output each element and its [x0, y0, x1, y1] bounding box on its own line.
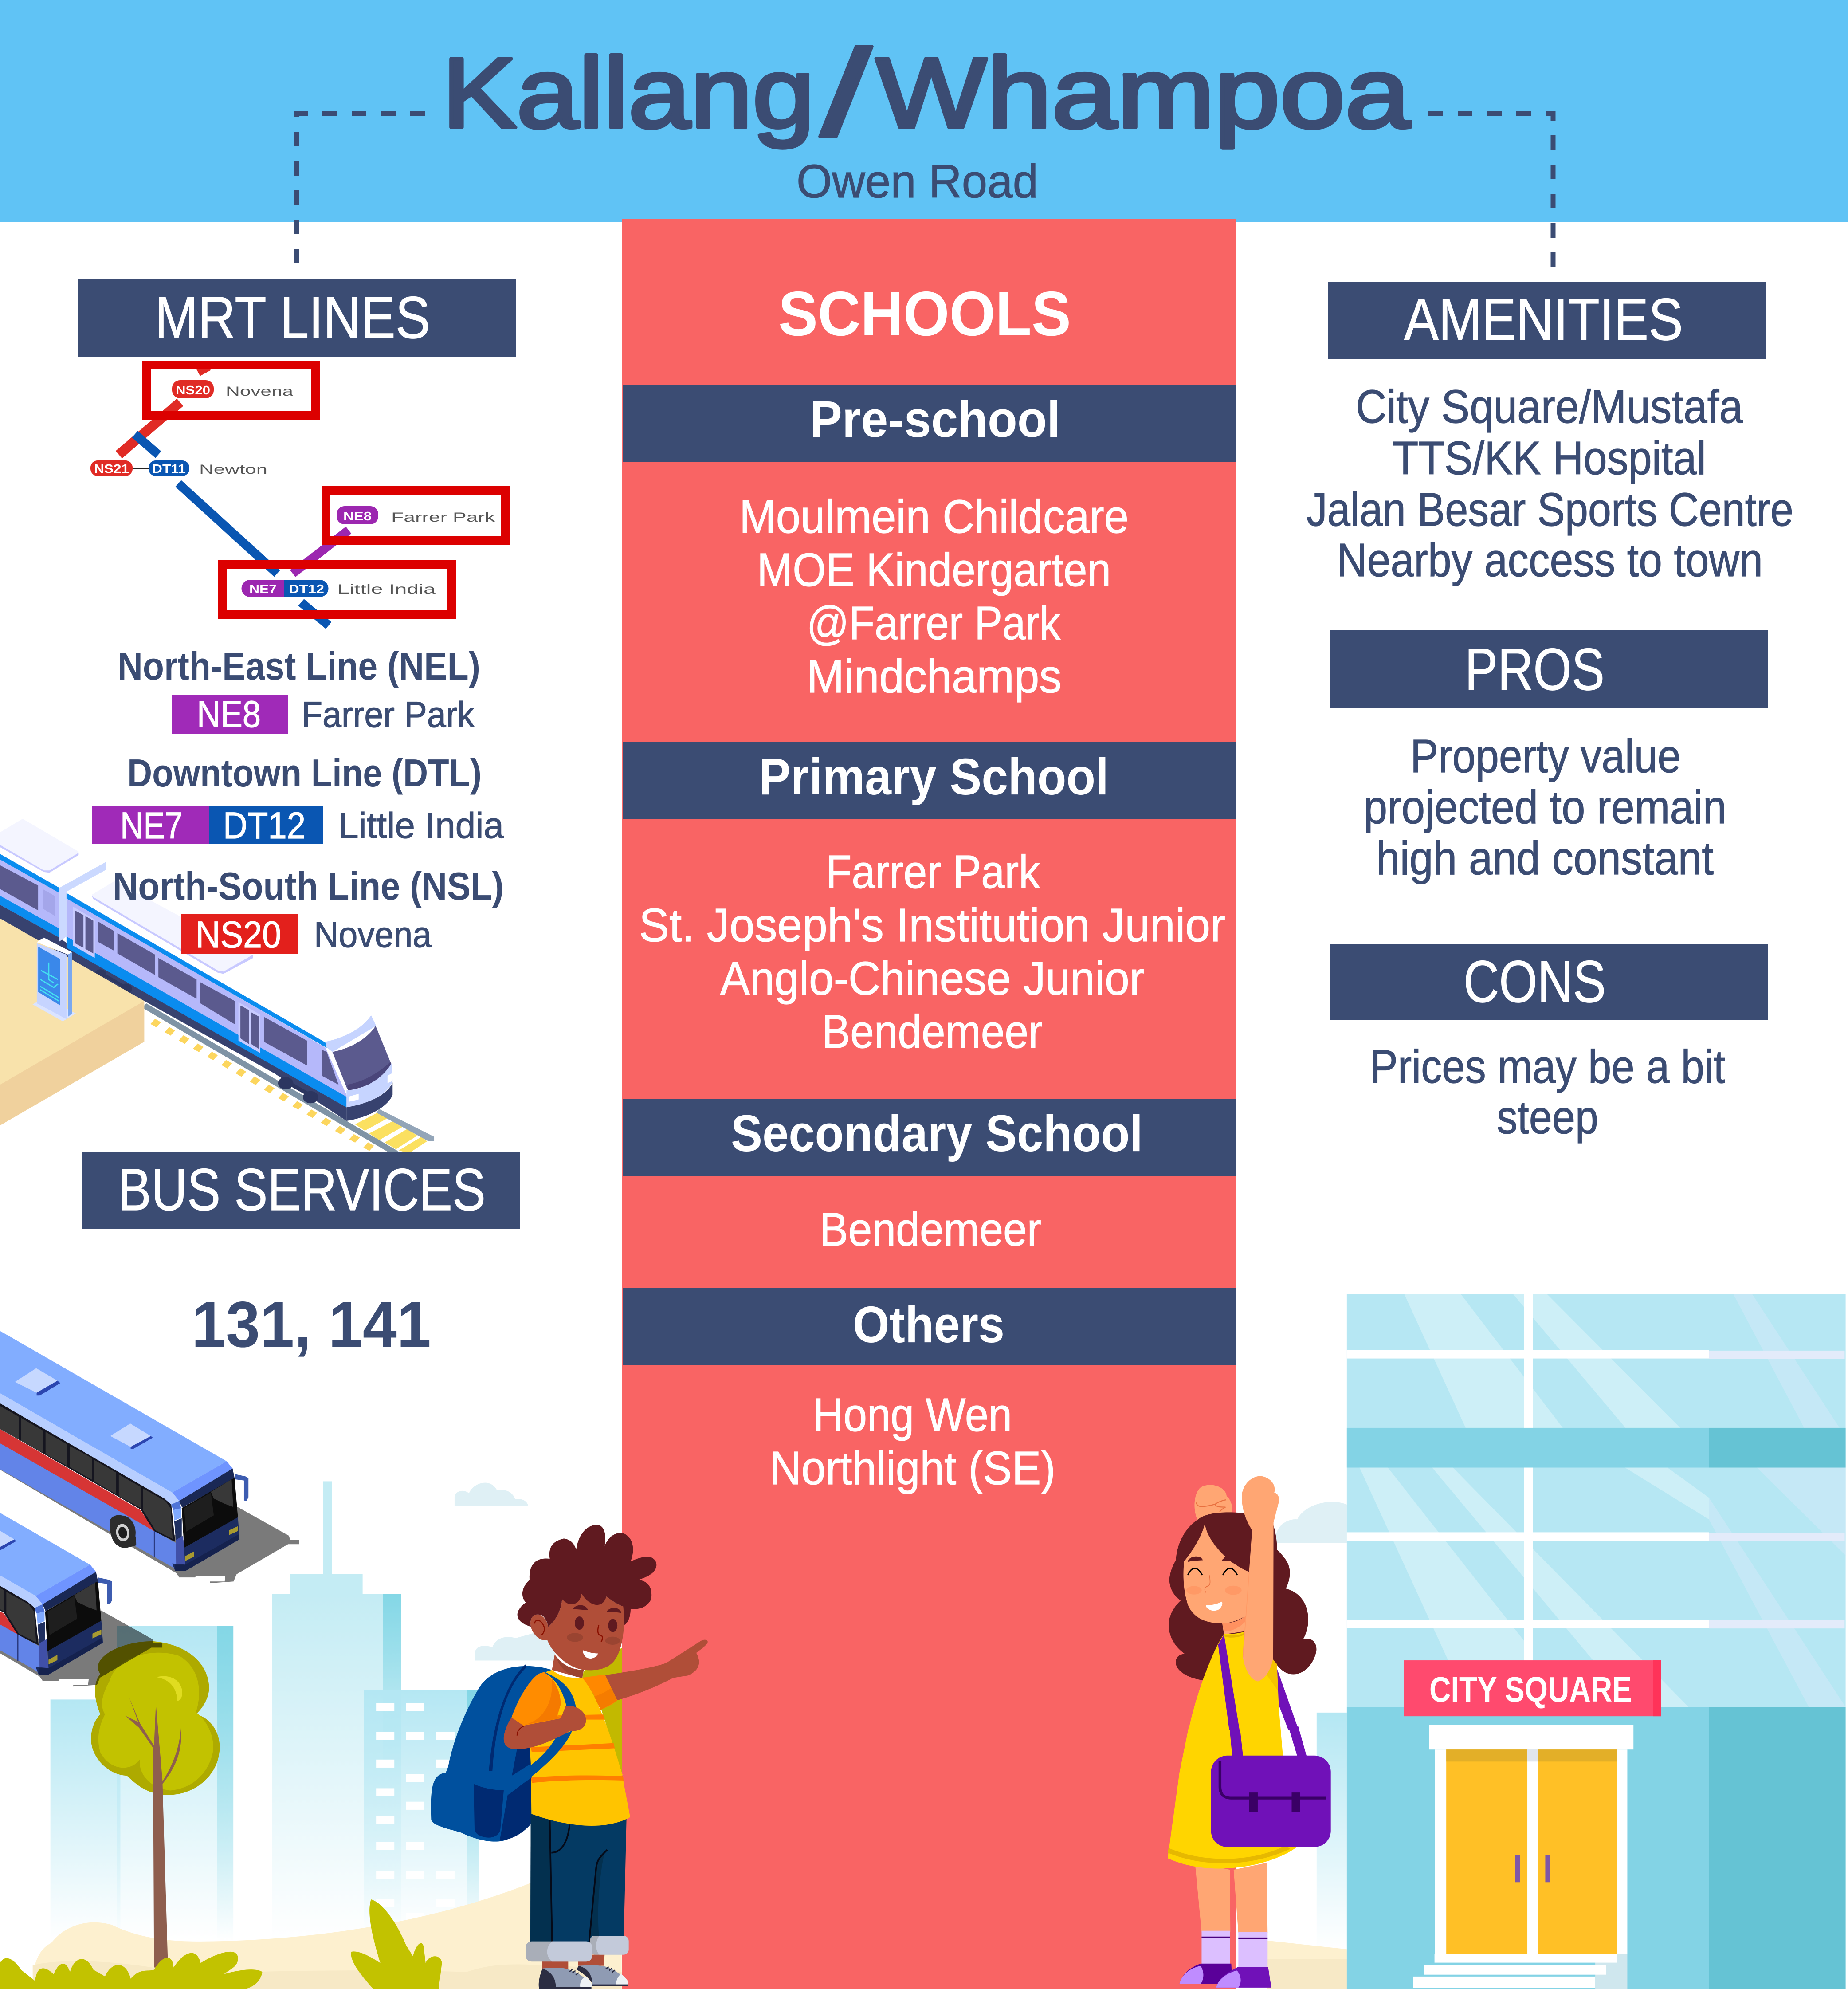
text block: downtown line: DT12: [223, 805, 306, 846]
panel: others: Others: [853, 1296, 1004, 1353]
text block: downtown line: Downtown Line (DTL): [127, 751, 482, 795]
mrt map: Novena: [226, 384, 293, 399]
panel: amenities: Nearby access to town: [1337, 534, 1763, 586]
panel: secondary school: Secondary School: [731, 1105, 1143, 1162]
panel: primary school: [623, 742, 1236, 1058]
text block: north-east line: [118, 644, 480, 735]
illustration: tree: [91, 1641, 220, 1968]
illustration: bus rear: [0, 1356, 162, 1686]
mrt map: NS20: [176, 383, 210, 397]
panel: pre-school: @Farrer Park: [807, 597, 1061, 649]
illustration: city square building: [1267, 1294, 1846, 1989]
mrt map: Farrer Park: [391, 510, 496, 525]
text block: north-east line: NE8: [197, 693, 261, 735]
dashed connector left: [297, 114, 425, 269]
panel: amenities: TTS/KK Hospital: [1393, 432, 1706, 484]
panel: primary school: St. Joseph's Institution Junior: [639, 899, 1225, 951]
panel: pros: [1330, 630, 1768, 884]
panel: mrt lines heading: MRT LINES: [155, 285, 430, 351]
sign label: city square: CITY SQUARE: [1429, 1670, 1632, 1709]
title: Whampoa: [876, 37, 1411, 149]
illustration: train: [0, 819, 434, 1153]
text block: north-east line: Farrer Park: [302, 695, 475, 735]
mrt map: NE8: [343, 509, 372, 523]
panel: others: Northlight (SE): [770, 1442, 1055, 1494]
text block: north-south line: NS20: [196, 914, 281, 955]
panel: secondary school: [623, 1099, 1236, 1256]
text block: north-east line: North-East Line (NEL): [118, 644, 480, 688]
panel: primary school: Bendemeer: [822, 1006, 1043, 1058]
panel: pre-school: Mindchamps: [807, 650, 1062, 703]
bus numbers: 131, 141: [192, 1288, 431, 1360]
panel: cons: steep: [1497, 1091, 1598, 1144]
illustration: city skyline: [32, 1481, 622, 1989]
panel: pros: projected to remain: [1364, 781, 1726, 833]
panel: pros: PROS: [1465, 637, 1605, 703]
text block: downtown line: NE7: [120, 805, 183, 846]
subtitle: Owen Road: [796, 155, 1038, 208]
schools column background: [622, 219, 1236, 1989]
panel: amenities: City Square/Mustafa: [1356, 381, 1743, 433]
text block: downtown line: [92, 751, 504, 846]
panel: primary school: Primary School: [759, 748, 1109, 806]
mrt map: NS21: [94, 462, 129, 476]
illustration: girl: [1168, 1476, 1331, 1988]
panel: pre-school: MOE Kindergarten: [757, 544, 1111, 596]
text block: downtown line: Little India: [338, 806, 504, 846]
panel: cons: Prices may be a bit: [1370, 1041, 1725, 1093]
mrt map: DT11: [152, 462, 186, 476]
title: Kallang: [442, 37, 815, 149]
panel: others: Hong Wen: [813, 1389, 1012, 1441]
illustration: boy: [431, 1525, 708, 1989]
mrt map: [90, 365, 506, 625]
illustration: bus front: [0, 1253, 299, 1583]
text block: north-south line: Novena: [314, 915, 432, 955]
panel: primary school: Farrer Park: [826, 846, 1040, 898]
panel: pros: Property value: [1410, 730, 1681, 782]
mrt map: Little India: [337, 582, 436, 597]
panel: bus services heading: BUS SERVICES: [118, 1157, 486, 1223]
text block: north-south line: North-South Line (NSL): [113, 864, 504, 908]
mrt map: NE7: [249, 582, 277, 596]
mrt map: Newton: [199, 462, 267, 477]
panel: others: [623, 1288, 1236, 1494]
panel: cons: [1330, 944, 1768, 1144]
panel: pre-school: [623, 385, 1236, 703]
header band: [0, 0, 1848, 222]
illustration: foreground bushes: [0, 1899, 442, 1989]
panel: secondary school: Bendemeer: [820, 1203, 1041, 1256]
panel: amenities: AMENITIES: [1404, 287, 1683, 353]
panel: amenities: Jalan Besar Sports Centre: [1307, 483, 1793, 536]
panel: cons: CONS: [1463, 949, 1606, 1015]
dashed connector right: [1428, 114, 1553, 271]
panel: pros: high and constant: [1376, 832, 1714, 884]
panel: amenities: [1307, 282, 1793, 586]
panel: mrt lines heading: [78, 279, 516, 357]
mrt map: DT12: [289, 582, 324, 596]
panel: schools heading: SCHOOLS: [778, 279, 1071, 349]
text block: north-south line: [113, 864, 504, 955]
panel: primary school: Anglo-Chinese Junior: [720, 952, 1144, 1005]
title: /: [821, 25, 871, 161]
panel: pre-school: Moulmein Childcare: [739, 491, 1129, 543]
panel: pre-school: Pre-school: [810, 390, 1060, 448]
